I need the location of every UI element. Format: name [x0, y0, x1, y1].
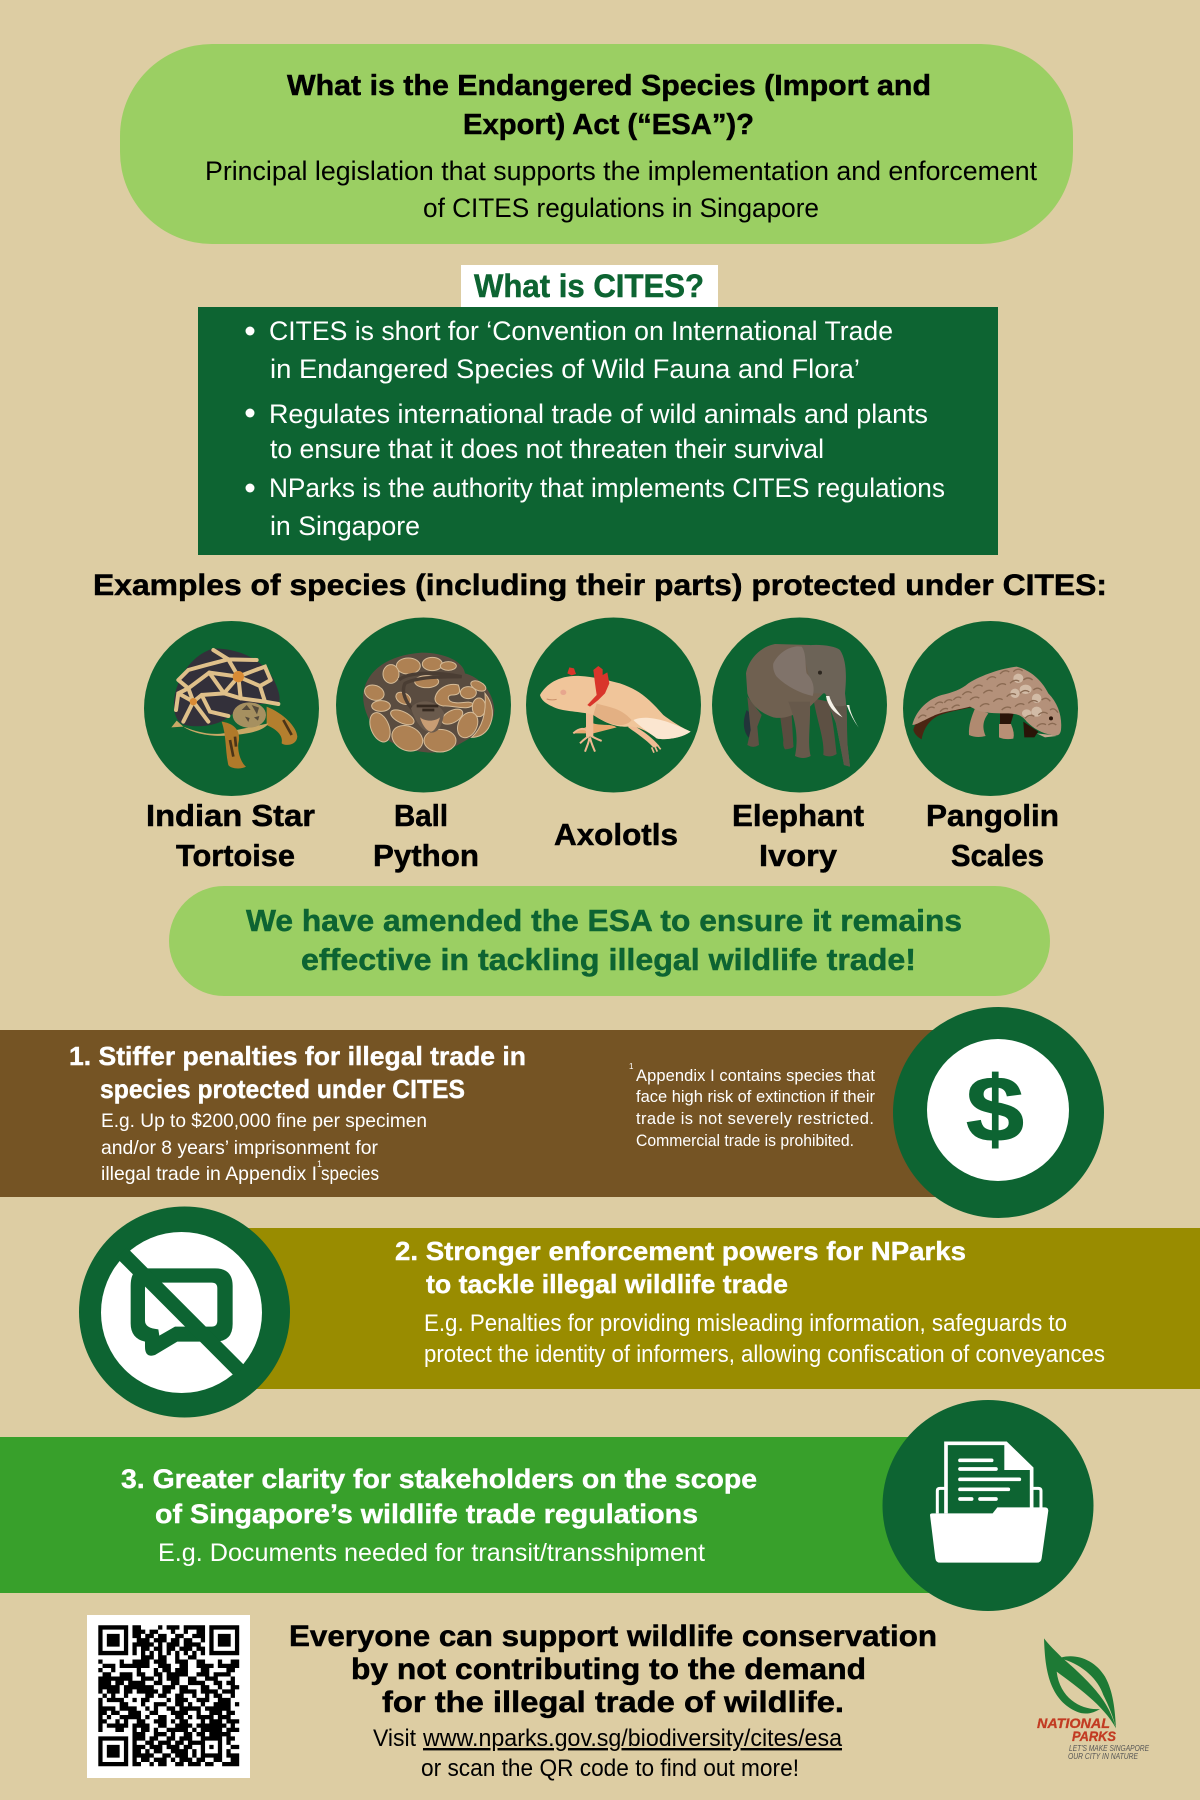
- label: Axolotls: Axolotls: [554, 817, 678, 852]
- species: pangolin scales: [903, 621, 1078, 873]
- heading: ESA question: Export) Act (“ESA”)?: [463, 109, 754, 141]
- text: CITES bullet points: [246, 316, 945, 541]
- text: CITES bullet points: CITES is short for ‘Convention on International Trade: [269, 316, 893, 346]
- text: Appendix I footnote: trade is not severely restricted.: [636, 1110, 874, 1128]
- heading: greater clarity: of Singapore’s wildlife trade regulations: [155, 1499, 698, 1529]
- text: CITES bullet points: in Endangered Species of Wild Fauna and Flora’: [270, 354, 860, 384]
- logo: National Parks: NATIONAL: [1037, 1715, 1110, 1731]
- text: Appendix I footnote: Appendix I contains species that: [636, 1067, 875, 1085]
- label: Ball Python: Python: [373, 838, 479, 873]
- logo: National Parks: PARKS: [1072, 1728, 1117, 1744]
- panel: what is CITES: [198, 265, 998, 555]
- species: ball python: [336, 618, 511, 873]
- label: Pangolin Scales: [926, 798, 1059, 873]
- logo: National Parks: OUR CITY IN NATURE: [1068, 1752, 1139, 1761]
- text: ESA definition: Principal legislation that supports the implementation and enforcement: [205, 156, 1037, 186]
- panel: 3 greater clarity: [0, 1400, 1094, 1611]
- text: clarity example: E.g. Documents needed for transit/transshipment: [158, 1539, 705, 1567]
- icon: document folder: [882, 1400, 1094, 1611]
- text: CITES bullet points: to ensure that it does not threaten their survival: [270, 434, 824, 464]
- icon: dollar sign: $: [966, 1057, 1024, 1161]
- text: website link and QR prompt: Visit: [373, 1725, 416, 1752]
- callout: ESA amended: We have amended the ESA to ensure it remains: [246, 903, 962, 938]
- heading: stronger enforcement: to tackle illegal wildlife trade: [426, 1269, 788, 1299]
- text: Appendix I footnote: 1: [629, 1062, 634, 1071]
- label: Indian Star Tortoise: Tortoise: [176, 838, 295, 873]
- heading: greater clarity: 3. Greater clarity for stakeholders on the scope: [121, 1464, 757, 1494]
- icon: pangolin: [912, 667, 1061, 739]
- icon: no-chat symbol: [79, 1206, 290, 1418]
- label: Pangolin Scales: Scales: [951, 838, 1044, 873]
- label: Indian Star Tortoise: Indian Star: [146, 798, 315, 833]
- label: Ball Python: [373, 798, 479, 873]
- text: penalty example: [101, 1110, 427, 1185]
- logo: National Parks: LET'S MAKE SINGAPORE: [1069, 1744, 1150, 1753]
- text: Appendix I footnote: [629, 1062, 876, 1150]
- text: call to action: for the illegal trade of wildlife.: [382, 1686, 844, 1719]
- text: enforcement example: E.g. Penalties for providing misleading information, safeguards to: [424, 1310, 1067, 1337]
- text: penalty example: and/or 8 years’ imprisonment for: [101, 1137, 378, 1159]
- text: CITES bullet points: Regulates international trade of wild animals and plants: [269, 399, 928, 429]
- text: ESA definition: [205, 156, 1037, 223]
- species: Indian star tortoise: [144, 621, 319, 873]
- species: elephant ivory: [712, 618, 887, 873]
- heading: greater clarity: [121, 1464, 757, 1529]
- label: Elephant Ivory: [732, 798, 864, 873]
- species: axolotl: [526, 618, 701, 852]
- text: CITES bullet points: NParks is the authority that implements CITES regulations: [269, 473, 945, 503]
- label: Pangolin Scales: Pangolin: [926, 798, 1059, 833]
- text: CITES bullet points: in Singapore: [270, 511, 420, 541]
- text: website link and QR prompt: www.nparks.gov.sg/biodiversity/cites/esa: [422, 1725, 843, 1752]
- heading: stiffer penalties: [69, 1041, 526, 1104]
- text: call to action: by not contributing to the demand: [351, 1653, 866, 1686]
- heading: ESA question: [287, 70, 931, 141]
- text: Appendix I footnote: Commercial trade is prohibited.: [636, 1132, 854, 1150]
- panel: what is the ESA: [120, 44, 1073, 244]
- text: call to action: Everyone can support wildlife conservation: [289, 1620, 937, 1653]
- text: enforcement example: protect the identity of informers, allowing confiscation of conveyances: [424, 1341, 1105, 1368]
- heading: stronger enforcement: [395, 1236, 966, 1299]
- callout: ESA amended: effective in tackling illegal wildlife trade!: [301, 942, 916, 977]
- text: Appendix I footnote: face high risk of extinction if their: [636, 1088, 876, 1106]
- label: Indian Star Tortoise: [146, 798, 315, 873]
- icon: python: [362, 653, 494, 756]
- text: website link and QR prompt: or scan the QR code to find out more!: [421, 1755, 799, 1782]
- heading: stiffer penalties: 1. Stiffer penalties for illegal trade in: [69, 1041, 526, 1071]
- icon: elephant: [744, 644, 859, 767]
- text: call to action: [289, 1620, 937, 1782]
- QR code: [87, 1615, 250, 1778]
- panel: 2 stronger enforcement: [79, 1206, 1200, 1418]
- heading: stiffer penalties: species protected under CITES: [100, 1074, 465, 1104]
- heading: stronger enforcement: 2. Stronger enforcement powers for NParks: [395, 1236, 966, 1266]
- icon: dollar sign: [893, 1007, 1104, 1218]
- logo: National Parks: [1037, 1638, 1150, 1761]
- icon: tortoise: [171, 648, 297, 768]
- text: enforcement example: [424, 1310, 1105, 1368]
- text: website link and QR prompt: [373, 1725, 843, 1782]
- text: penalty example: E.g. Up to $200,000 fine per specimen: [101, 1110, 427, 1132]
- callout: ESA amended: [169, 886, 1050, 996]
- heading: examples of species: Examples of species (including their parts) protected under CITES:: [93, 569, 1107, 602]
- panel: 1 stiffer penalties: [0, 1007, 1104, 1218]
- label: Elephant Ivory: Elephant: [732, 798, 864, 833]
- heading: ESA question: What is the Endangered Species (Import and: [287, 70, 931, 102]
- text: penalty example: illegal trade in Appendix I: [101, 1163, 317, 1185]
- label: Elephant Ivory: Ivory: [759, 838, 838, 873]
- text: ESA definition: of CITES regulations in Singapore: [423, 193, 819, 223]
- heading: what is CITES: What is CITES?: [474, 268, 704, 304]
- text: penalty example: species: [321, 1163, 379, 1185]
- label: Ball Python: Ball: [394, 798, 448, 833]
- text: penalty example: 1: [317, 1159, 322, 1169]
- icon: axolotl: [540, 666, 691, 753]
